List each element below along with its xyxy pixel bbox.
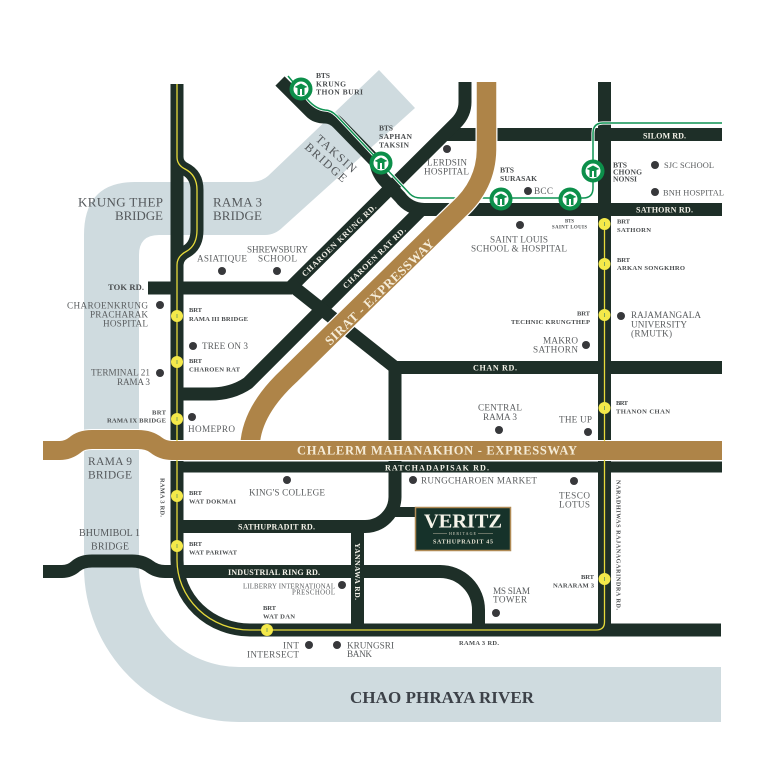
- label: Bhumibol 1 Bridge: BRIDGE: [91, 541, 129, 552]
- label: Saint Louis School and Hospital: SCHOOL & HOSPITAL: [471, 244, 567, 254]
- label: Krung Thep Bridge: [78, 195, 163, 223]
- label: Central Rama 3: CENTRAL: [478, 403, 522, 413]
- label: Tesco Lotus: TESCO: [559, 490, 590, 500]
- label: Rama 3 Rd bottom: RAMA 3 RD.: [459, 640, 499, 647]
- label: BTS Surasak: SURASAK: [500, 174, 537, 183]
- label: BTS Krung Thon Buri: THON BURI: [316, 88, 363, 96]
- label: BRT Wat Pariwat: [189, 541, 238, 556]
- label: BRT Sathorn: [617, 218, 651, 234]
- road: Silom: [445, 128, 722, 141]
- label: Rama 9 Bridge: [88, 456, 132, 481]
- label: BTS Saphan Taksin: SAPHAN: [379, 132, 413, 141]
- label: Ratchadapisak Rd: RATCHADAPISAK RD.: [385, 464, 489, 473]
- label: Terminal 21 Rama 3: [91, 368, 150, 387]
- label: BRT Nararam 3: NARARAM 3: [553, 582, 595, 589]
- label: BTS Chong Nonsi: BTS: [613, 160, 627, 169]
- label: Rajamangala University: [631, 310, 701, 339]
- label: Int Intersect: INT: [283, 640, 299, 650]
- label: BRT Rama III Bridge: BRT: [189, 307, 203, 314]
- logo rules: [433, 532, 493, 534]
- label: BRT Wat Dokmai: WAT DOKMAI: [189, 498, 236, 505]
- label: Makro Sathorn: SATHORN: [533, 345, 578, 355]
- label: Shrewsbury School: SHREWSBURY: [247, 245, 308, 255]
- label: Charoenkrung Pracharak Hospital: CHAROENKRUNG: [67, 301, 148, 311]
- label: Industrial Ring Rd: INDUSTRIAL RING RD.: [228, 568, 320, 577]
- label: Bhumibol 1 Bridge: [79, 528, 140, 552]
- label: Lilberry International Preschool: PRESCHOOL: [292, 590, 335, 597]
- BTS line: [288, 76, 722, 198]
- label: MS Siam Tower: MS SIAM: [493, 586, 530, 596]
- label: BRT Nararam 3: BRT: [581, 574, 595, 581]
- label: Yannawa Rd: YANNAWA RD.: [353, 543, 362, 600]
- label: BRT Wat Pariwat: WAT PARIWAT: [189, 549, 238, 556]
- Chalerm Mahanakhon expressway: [43, 440, 722, 450]
- label: Chao Phraya River: CHAO PHRAYA RIVER: [350, 688, 535, 707]
- label: Rama 9 Bridge: BRIDGE: [88, 469, 132, 481]
- station: Chong Nonsi: [584, 162, 602, 180]
- label: BRT Thanon Chan: THANON CHAN: [616, 408, 670, 415]
- label: Rajamangala University: (RMUTK): [631, 329, 672, 339]
- logo wordmark: VERITZ: [424, 511, 502, 533]
- label: BRT Technic Krungthep: BRT: [577, 310, 591, 317]
- label: Shrewsbury School: SCHOOL: [258, 254, 297, 264]
- label: Int Intersect: INTERSECT: [247, 650, 299, 660]
- label: Rama 3 Bridge: [213, 195, 262, 223]
- label: Rungcharoen Market: RUNGCHAROEN MARKET: [421, 475, 537, 485]
- station: Saphan Taksin: [372, 154, 390, 172]
- label: Asiatique: ASIATIQUE: [197, 254, 247, 264]
- label: BRT Thanon Chan: BRT: [616, 400, 629, 407]
- label: BRT Wat Dan: [263, 605, 295, 620]
- landmark dots: [156, 145, 659, 649]
- label: BRT Arkan Songkhro: BRT: [617, 257, 631, 264]
- label: Krung Thep Bridge: KRUNG THEP: [78, 195, 163, 210]
- label: Tok Rd: TOK RD.: [108, 282, 144, 292]
- road network: [43, 81, 722, 630]
- label: BNH Hospital: BNH HOSPITAL: [663, 188, 724, 197]
- road: project access: [395, 507, 416, 517]
- road: Ratchadapisak: [183, 462, 722, 472]
- road: Charoen Krung: [290, 82, 465, 288]
- logo subline: HERITAGE: [449, 531, 477, 536]
- label: Chan Rd: CHAN RD.: [473, 364, 517, 373]
- label: BCC: BCC: [534, 186, 553, 196]
- label: BTS Surasak: [500, 166, 537, 183]
- label: Chalerm Mahanakhon Expressway: CHALERM MAHANAKHON - EXPRESSWAY: [297, 444, 577, 458]
- label: Sirat Expressway: SIRAT - EXPRESSWAY: [322, 236, 438, 348]
- label: BRT Rama III Bridge: [189, 307, 249, 323]
- BRT line: [177, 84, 604, 630]
- label: Lerdsin Hospital: HOSPITAL: [424, 167, 469, 177]
- label: BRT Thanon Chan: [616, 400, 670, 415]
- label: Rama 3 Bridge: RAMA 3: [213, 195, 262, 210]
- label: SJC School: SJC SCHOOL: [664, 161, 714, 170]
- station: Surasak: [492, 190, 510, 208]
- road: Tok: [148, 282, 292, 294]
- road: diagonal to Chan: [288, 282, 722, 368]
- road: Sathupradit and connector: [183, 367, 395, 527]
- label: BTS Saphan Taksin: [379, 124, 413, 150]
- label: BRT Wat Pariwat: BRT: [189, 541, 203, 548]
- label: Terminal 21 Rama 3: RAMA 3: [117, 377, 150, 387]
- label: BRT Arkan Songkhro: ARKAN SONGKHRO: [617, 265, 685, 272]
- label: Sathorn Rd: SATHORN RD.: [636, 206, 693, 215]
- label: BTS Saphan Taksin: BTS: [379, 124, 393, 133]
- label: BRT Technic Krungthep: TECHNIC KRUNGTHEP: [511, 319, 590, 326]
- label: BTS Saphan Taksin: TAKSIN: [379, 141, 410, 150]
- label: BRT Wat Dan: WAT DAN: [263, 613, 295, 620]
- label: BTS Saint Louis: [552, 220, 587, 231]
- BRT stations: [171, 218, 610, 636]
- label: Makro Sathorn: MAKRO: [543, 335, 578, 345]
- label: BTS Chong Nonsi: NONSI: [613, 175, 637, 184]
- label: BRT Sathorn: SATHORN: [617, 227, 651, 234]
- road: Industrial Ring: [43, 561, 478, 630]
- label: Krungsri Bank: BANK: [347, 649, 372, 659]
- label: Shrewsbury School: [247, 245, 308, 264]
- bridge labels: [78, 132, 535, 707]
- label: Makro Sathorn: [533, 335, 578, 355]
- label: Lilberry International Preschool: LILBERRY INTERNATIONAL: [243, 583, 335, 590]
- label: Lilberry International Preschool: [243, 583, 335, 597]
- label: Rama 3 Bridge: BRIDGE: [213, 208, 262, 223]
- label: Lerdsin Hospital: LERDSIN: [427, 158, 467, 168]
- label: Charoenkrung Pracharak Hospital: PRACHARAK: [90, 310, 148, 320]
- road: Charoen Rat: [183, 209, 422, 394]
- label: MS Siam Tower: TOWER: [493, 595, 528, 605]
- label: Tesco Lotus: [559, 490, 590, 510]
- station: Saint Louis: [560, 190, 580, 208]
- label: Lerdsin Hospital: [424, 158, 469, 177]
- label: Taksin Bridge: BRIDGE: [302, 140, 350, 185]
- label: BRT Rama III Bridge: RAMA III BRIDGE: [189, 316, 249, 323]
- label: Krungsri Bank: [347, 640, 394, 659]
- label: Naradhiwas Rajanagarindra Rd: NARADHIWAS RAJANAGARINDRA RD.: [614, 480, 622, 610]
- label: The Up: THE UP: [559, 415, 592, 425]
- label: Int Intersect: [247, 640, 299, 660]
- label: BRT Nararam 3: [553, 574, 595, 589]
- label: Rama 9 Bridge: RAMA 9: [88, 456, 132, 468]
- label: BTS Krung Thon Buri: BTS: [316, 71, 330, 80]
- road: Rama 3 bridge bypass: [177, 157, 197, 265]
- label: BRT Charoen Rat: BRT: [189, 358, 203, 365]
- label: Tesco Lotus: LOTUS: [559, 500, 590, 510]
- label: Charoen Rat Rd: CHAROEN RAT RD.: [341, 226, 408, 290]
- label: Charoen Krung Rd: CHAROEN KRUNG RD.: [300, 202, 378, 278]
- label: Homepro: HOMEPRO: [188, 424, 235, 434]
- label: Sathupradit Rd: SATHUPRADIT RD.: [238, 522, 315, 532]
- label: BTS Krung Thon Buri: [316, 71, 363, 96]
- label: Charoenkrung Pracharak Hospital: [67, 301, 148, 329]
- label: Central Rama 3: [478, 403, 522, 422]
- label: BTS Surasak: BTS: [500, 166, 514, 175]
- label: BRT Technic Krungthep: [511, 310, 591, 326]
- station labels: [107, 71, 685, 620]
- label: Central Rama 3: RAMA 3: [483, 412, 517, 422]
- label: BRT Rama IX Bridge: RAMA IX BRIDGE: [107, 418, 167, 425]
- road: Yannawa: [351, 526, 364, 630]
- label: BRT Wat Dokmai: [189, 490, 236, 505]
- label: BTS Saint Louis: BTS: [565, 220, 574, 225]
- label: Saint Louis School and Hospital: [471, 234, 567, 254]
- Sirat expressway: [250, 82, 486, 445]
- road: Krung Thon Buri to Sathorn: [280, 81, 722, 210]
- label: BTS Chong Nonsi: [613, 160, 642, 184]
- label: BTS Chong Nonsi: CHONG: [613, 168, 642, 177]
- label: BRT Charoen Rat: CHAROEN RAT: [189, 367, 241, 374]
- road: Rama 3 west: [177, 84, 721, 630]
- label: Krungsri Bank: KRUNGSRI: [347, 640, 394, 650]
- label: Rama 3 Rd vertical: RAMA 3 RD.: [158, 478, 166, 517]
- label: Terminal 21 Rama 3: TERMINAL 21: [91, 368, 150, 378]
- logo location: SATHUPRADIT 45: [433, 540, 493, 546]
- BTS stations: [292, 80, 602, 208]
- label: BRT Rama IX Bridge: BRT: [152, 409, 167, 416]
- landmark labels: [67, 158, 724, 660]
- label: BTS Saint Louis: SAINT LOUIS: [552, 226, 587, 231]
- label: King's College: KING'S COLLEGE: [249, 488, 325, 498]
- label: BRT Sathorn: BRT: [617, 218, 631, 225]
- station: Krung Thon Buri: [292, 80, 310, 98]
- label: Rajamangala University: RAJAMANGALA: [631, 310, 701, 320]
- label: Silom Rd: SILOM RD.: [643, 131, 686, 140]
- label: Charoenkrung Pracharak Hospital: HOSPITAL: [103, 319, 148, 329]
- project logo: Veritz Heritage: [416, 508, 510, 550]
- label: Taksin Bridge: TAKSIN: [313, 132, 360, 176]
- road: Narathiwas: [598, 82, 611, 630]
- label: BRT Rama IX Bridge: [107, 409, 167, 425]
- label: BRT Wat Dan: BRT: [263, 605, 277, 612]
- label: Krung Thep Bridge: BRIDGE: [115, 208, 163, 223]
- Chao Phraya river: [84, 70, 721, 722]
- road labels: [108, 131, 693, 647]
- label: BTS Krung Thon Buri: KRUNG: [316, 80, 346, 88]
- label: BRT Arkan Songkhro: [617, 257, 685, 272]
- label: BRT Charoen Rat: [189, 358, 241, 374]
- label: Tree On 3: TREE ON 3: [202, 341, 248, 351]
- label: Rajamangala University: UNIVERSITY: [631, 319, 687, 329]
- label: Bhumibol 1 Bridge: BHUMIBOL 1: [79, 528, 140, 539]
- label: BRT Wat Dokmai: BRT: [189, 490, 203, 497]
- label: MS Siam Tower: [493, 586, 530, 605]
- label: Saint Louis School and Hospital: SAINT LOUIS: [490, 234, 548, 244]
